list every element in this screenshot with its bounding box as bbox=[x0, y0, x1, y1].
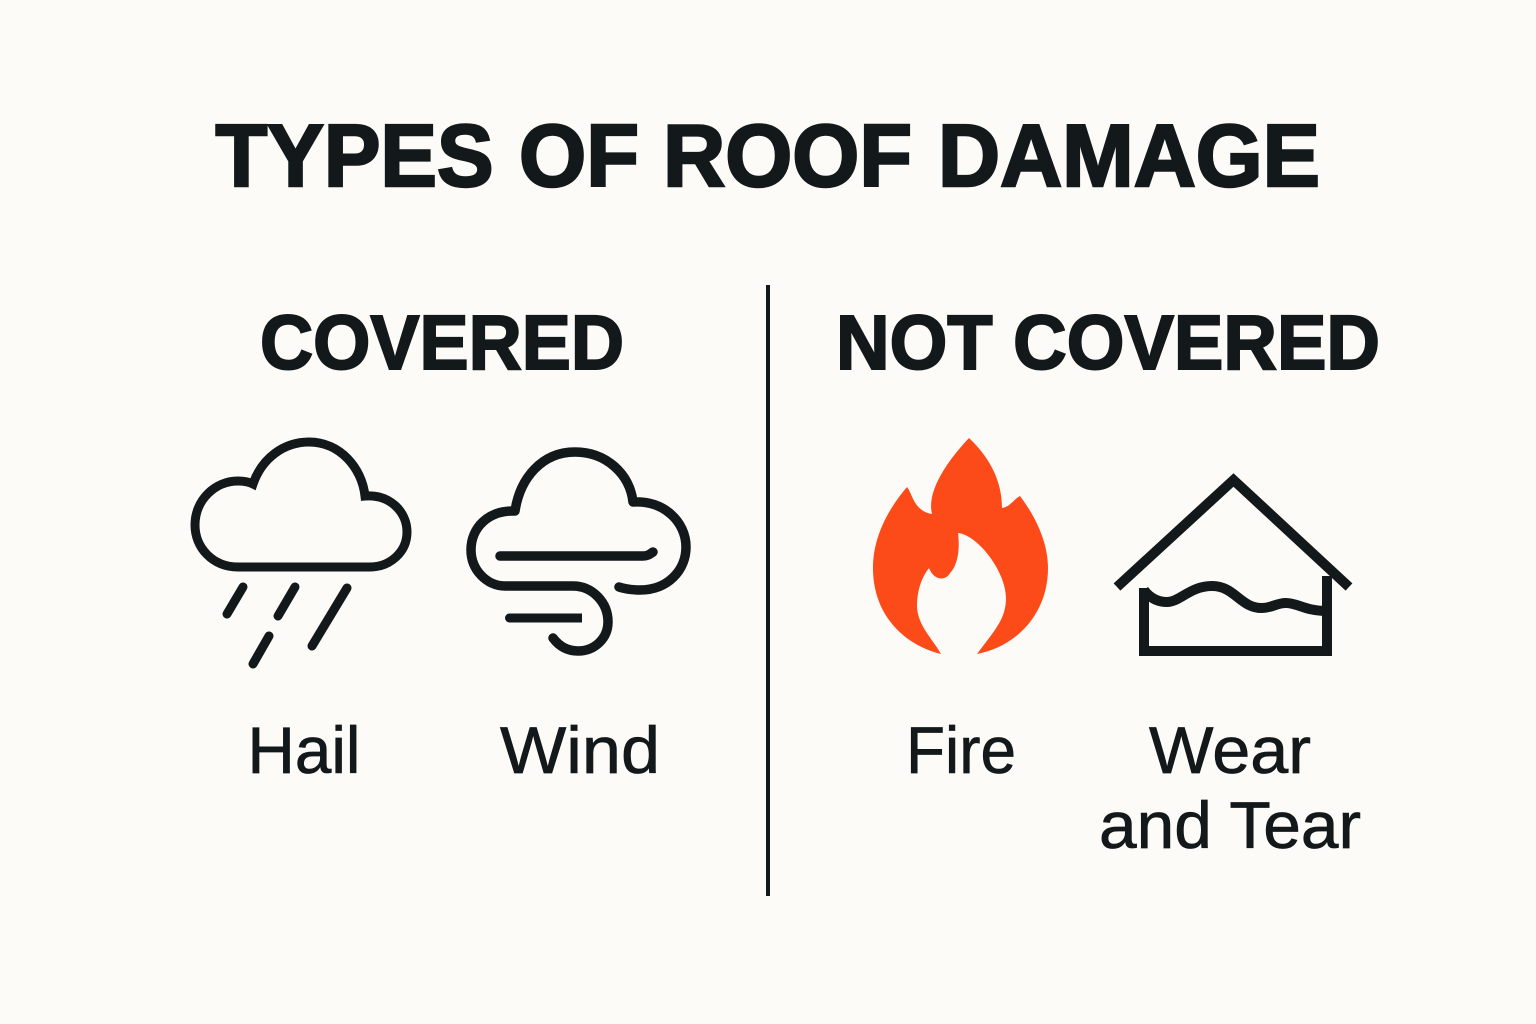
label: wear and tear: Wear bbox=[1149, 713, 1311, 787]
title: OF bbox=[519, 106, 639, 205]
label: wind: Wind bbox=[500, 713, 660, 787]
title: ROOF bbox=[663, 106, 912, 205]
icon: wind bbox=[471, 452, 686, 651]
icon: fire bbox=[873, 438, 1048, 654]
label: wear and tear: and Tear bbox=[1099, 788, 1361, 862]
heading: not covered: NOT COVERED bbox=[836, 300, 1380, 386]
title bbox=[216, 106, 1320, 205]
label: fire: Fire bbox=[906, 713, 1016, 787]
title: DAMAGE bbox=[938, 106, 1320, 205]
icon: house with water bbox=[1117, 480, 1349, 651]
divider line bbox=[766, 285, 770, 896]
icon: hail bbox=[195, 442, 407, 664]
label: hail: Hail bbox=[248, 713, 360, 787]
title: TYPES bbox=[216, 106, 494, 205]
label: wear and tear bbox=[1099, 713, 1361, 862]
heading: covered: COVERED bbox=[260, 300, 624, 386]
